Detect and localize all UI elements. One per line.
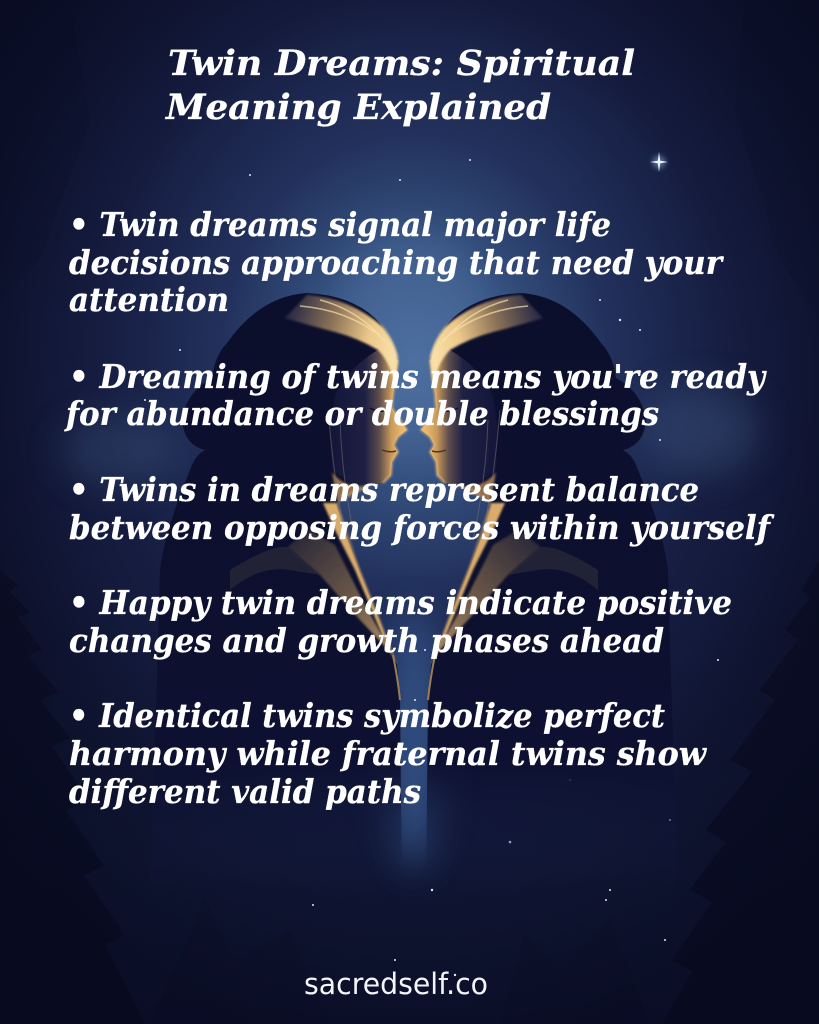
bullet 5 <box>69 696 708 811</box>
bullet 2 <box>64 357 768 433</box>
bullet list <box>64 205 775 811</box>
bullet 1: decisions approaching that need your <box>69 243 724 282</box>
bullet 3 <box>69 470 775 547</box>
bullet 4: changes and growth phases ahead <box>69 621 664 660</box>
bullet 1: attention <box>69 280 229 319</box>
title: Twin Dreams: Spiritual <box>168 43 635 84</box>
bullet 5: • Identical twins symbolize perfect <box>69 696 665 735</box>
left twin silhouette <box>150 293 407 890</box>
title <box>165 43 635 128</box>
bullet 4 <box>69 583 732 660</box>
bullet 1 <box>69 205 724 319</box>
bullet 3: between opposing forces within yourself <box>69 508 775 547</box>
bullet 3: • Twins in dreams represent balance <box>69 470 699 509</box>
stars <box>144 159 719 976</box>
bullet 2: • Dreaming of twins means you're ready <box>69 357 768 396</box>
bullet 5: harmony while fraternal twins show <box>69 734 708 773</box>
bright four-point star <box>650 152 668 172</box>
bullet 4: • Happy twin dreams indicate positive <box>69 583 732 622</box>
bullet 1: • Twin dreams signal major life <box>69 205 611 244</box>
title: Meaning Explained <box>165 87 551 128</box>
footer website: sacredself.co <box>304 967 488 1001</box>
bullet 2: for abundance or double blessings <box>64 394 659 433</box>
right twin silhouette <box>421 293 678 890</box>
bullet 5: different valid paths <box>69 772 421 811</box>
